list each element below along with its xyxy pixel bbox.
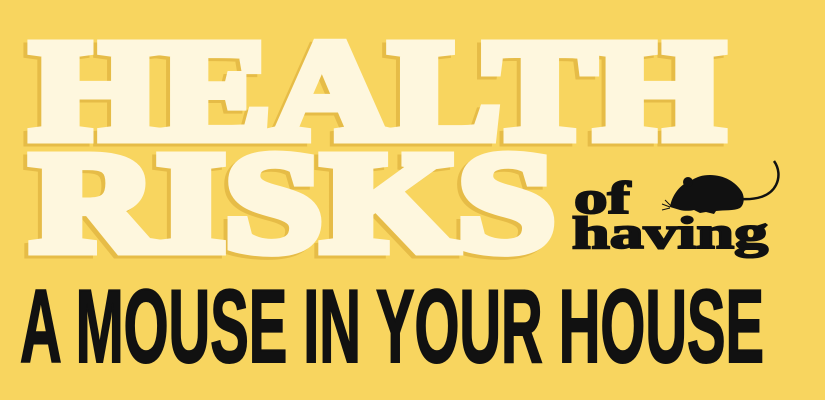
title: HEALTH: HEALTH — [27, 14, 720, 172]
subtitle: of: of — [574, 172, 631, 223]
title: HEALTH: HEALTH — [31, 11, 724, 169]
title: RISKS: RISKS — [27, 126, 551, 284]
subtitle: having: having — [572, 207, 768, 258]
title: RISKS: RISKS — [31, 123, 555, 281]
icon: mouse silhouette — [662, 161, 778, 214]
